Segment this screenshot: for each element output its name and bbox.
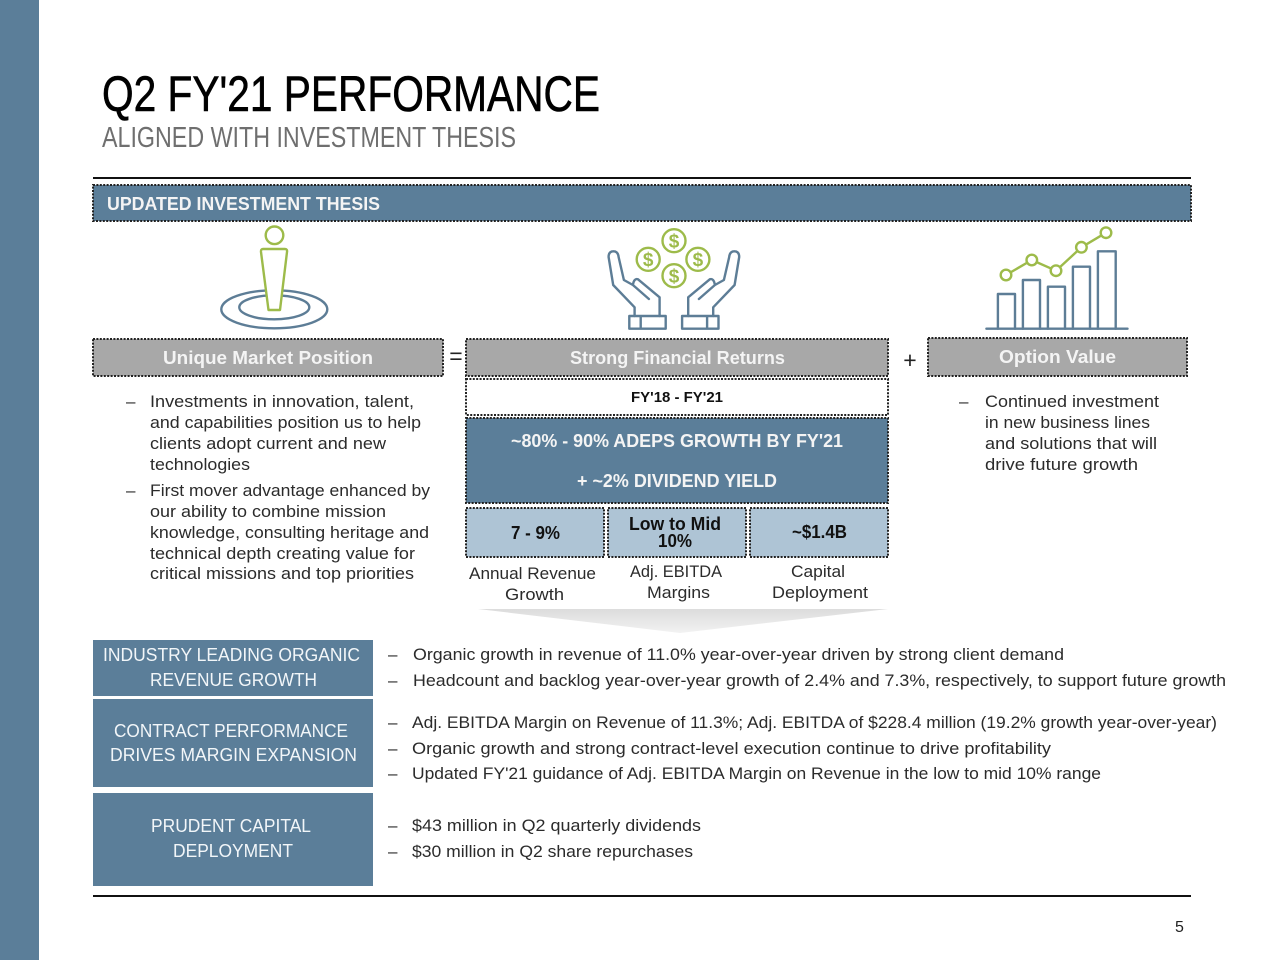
panel: margin expansion bbox=[93, 699, 373, 787]
metric: adj. EBITDA margins: Adj. EBITDA bbox=[630, 562, 723, 581]
text block: capital bullets: – bbox=[388, 816, 398, 835]
text block: unique market position bullets: Investments in innovation, talent, bbox=[150, 392, 414, 411]
section header: updated investment thesis: UPDATED INVESTMENT THESIS bbox=[107, 194, 380, 214]
title: Q2 FY'21 PERFORMANCE bbox=[102, 66, 600, 122]
panel: organic revenue growth: INDUSTRY LEADING ORGANIC bbox=[103, 645, 360, 665]
panel: organic revenue growth: REVENUE GROWTH bbox=[150, 670, 317, 690]
panel: margin expansion: DRIVES MARGIN EXPANSION bbox=[110, 745, 357, 765]
icon: hands with dollar coins: $ bbox=[643, 250, 654, 271]
heading: unique market position: Unique Market Position bbox=[163, 348, 373, 368]
metric: capital deployment: Capital bbox=[791, 562, 845, 581]
text block: unique market position bullets: – bbox=[126, 481, 136, 500]
text block: capital bullets bbox=[388, 816, 701, 861]
metric: adj. EBITDA margins: Margins bbox=[647, 583, 710, 602]
metric: adj. EBITDA margins bbox=[608, 508, 746, 602]
heading: strong financial returns: Strong Financial Returns bbox=[570, 348, 785, 368]
page number: 5 bbox=[1175, 919, 1184, 936]
panel: margin expansion: CONTRACT PERFORMANCE bbox=[114, 721, 348, 741]
text block: capital bullets: – bbox=[388, 842, 398, 861]
text block: margin bullets: Organic growth and strong contract-level execution continue to drive profitability bbox=[412, 739, 1052, 758]
text block: option value bullets: drive future growth bbox=[985, 455, 1138, 474]
left sidebar bbox=[0, 0, 39, 960]
text block: unique market position bullets: critical missions and top priorities bbox=[150, 564, 414, 583]
text block: unique market position bullets: First mover advantage enhanced by bbox=[150, 481, 431, 500]
text block: option value bullets: and solutions that will bbox=[985, 434, 1157, 453]
text block: organic growth bullets: – bbox=[388, 645, 398, 664]
icon: hands with dollar coins: $ bbox=[693, 250, 704, 271]
metric: adj. EBITDA margins: Low to Mid bbox=[629, 514, 721, 534]
icon: hands with dollar coins: $ bbox=[669, 266, 680, 288]
text block: margin bullets: – bbox=[388, 764, 398, 783]
metric: annual revenue growth bbox=[466, 508, 604, 604]
plus sign: + bbox=[903, 347, 917, 373]
period box: FY'18 - FY'21 bbox=[466, 379, 888, 415]
icon: growth bar chart bbox=[986, 227, 1128, 329]
icon: person on target bbox=[221, 226, 327, 328]
text block: organic growth bullets: Headcount and backlog year-over-year growth of 2.4% and 7.3%, respectively, to support future growth bbox=[413, 671, 1226, 690]
text block: unique market position bullets: – bbox=[126, 392, 136, 411]
text block: unique market position bullets bbox=[126, 392, 431, 583]
callout: ADEPS growth and dividend yield: ~80% - 90% ADEPS GROWTH BY FY'21 bbox=[511, 431, 843, 451]
icon: hands with dollar coins: $ bbox=[669, 232, 680, 252]
text block: capital bullets: $30 million in Q2 share repurchases bbox=[412, 842, 693, 861]
text block: option value bullets: – bbox=[959, 392, 969, 411]
metric: capital deployment: Deployment bbox=[772, 583, 868, 602]
text block: margin bullets: Updated FY'21 guidance of Adj. EBITDA Margin on Revenue in the low to mid 10% range bbox=[412, 764, 1101, 783]
text block: capital bullets: $43 million in Q2 quarterly dividends bbox=[412, 816, 701, 835]
panel: prudent capital deployment: DEPLOYMENT bbox=[173, 841, 293, 861]
text block: organic growth bullets bbox=[388, 645, 1226, 690]
heading: option value: Option Value bbox=[999, 347, 1116, 367]
heading: strong financial returns bbox=[466, 339, 888, 376]
metric: annual revenue growth: 7 - 9% bbox=[511, 523, 560, 543]
text block: margin bullets: – bbox=[388, 713, 398, 732]
heading: unique market position bbox=[93, 339, 443, 376]
callout: ADEPS growth and dividend yield: + ~2% DIVIDEND YIELD bbox=[577, 471, 777, 491]
text block: unique market position bullets: and capabilities position us to help bbox=[150, 413, 421, 432]
text block: margin bullets: Adj. EBITDA Margin on Revenue of 11.3%; Adj. EBITDA of $228.4 million (19.2% growth year-over-year) bbox=[412, 713, 1217, 732]
text block: unique market position bullets: our ability to combine mission bbox=[150, 502, 386, 521]
text block: margin bullets: – bbox=[388, 739, 398, 758]
text block: option value bullets bbox=[959, 392, 1159, 474]
section header: updated investment thesis bbox=[93, 185, 1191, 221]
metric: adj. EBITDA margins: 10% bbox=[658, 531, 692, 551]
panel: organic revenue growth bbox=[93, 640, 373, 696]
text block: option value bullets: Continued investment bbox=[985, 392, 1159, 411]
text block: organic growth bullets: Organic growth in revenue of 11.0% year-over-year driven by strong client demand bbox=[413, 645, 1064, 664]
metric: annual revenue growth: Annual Revenue bbox=[469, 564, 596, 583]
panel: prudent capital deployment bbox=[93, 793, 373, 886]
metric: capital deployment: ~$1.4B bbox=[792, 522, 847, 542]
panel: prudent capital deployment: PRUDENT CAPITAL bbox=[151, 816, 311, 836]
text block: option value bullets: in new business lines bbox=[985, 413, 1150, 432]
arrow: funnel pointing down bbox=[478, 609, 888, 633]
text block: margin bullets bbox=[388, 713, 1217, 783]
subtitle: ALIGNED WITH INVESTMENT THESIS bbox=[102, 122, 516, 154]
icon: hands with dollar coins bbox=[609, 229, 739, 329]
callout: ADEPS growth and dividend yield bbox=[466, 418, 888, 503]
metric: annual revenue growth: Growth bbox=[505, 585, 564, 604]
text block: unique market position bullets: knowledge, consulting heritage and bbox=[150, 523, 429, 542]
period box: FY'18 - FY'21: FY'18 - FY'21 bbox=[631, 390, 723, 406]
text block: unique market position bullets: technical depth creating value for bbox=[150, 544, 415, 563]
text block: unique market position bullets: technologies bbox=[150, 455, 250, 474]
text block: organic growth bullets: – bbox=[388, 671, 398, 690]
heading: option value bbox=[928, 338, 1187, 376]
metric: capital deployment bbox=[750, 508, 888, 602]
text block: unique market position bullets: clients adopt current and new bbox=[150, 434, 387, 453]
equals sign: = bbox=[449, 343, 463, 369]
